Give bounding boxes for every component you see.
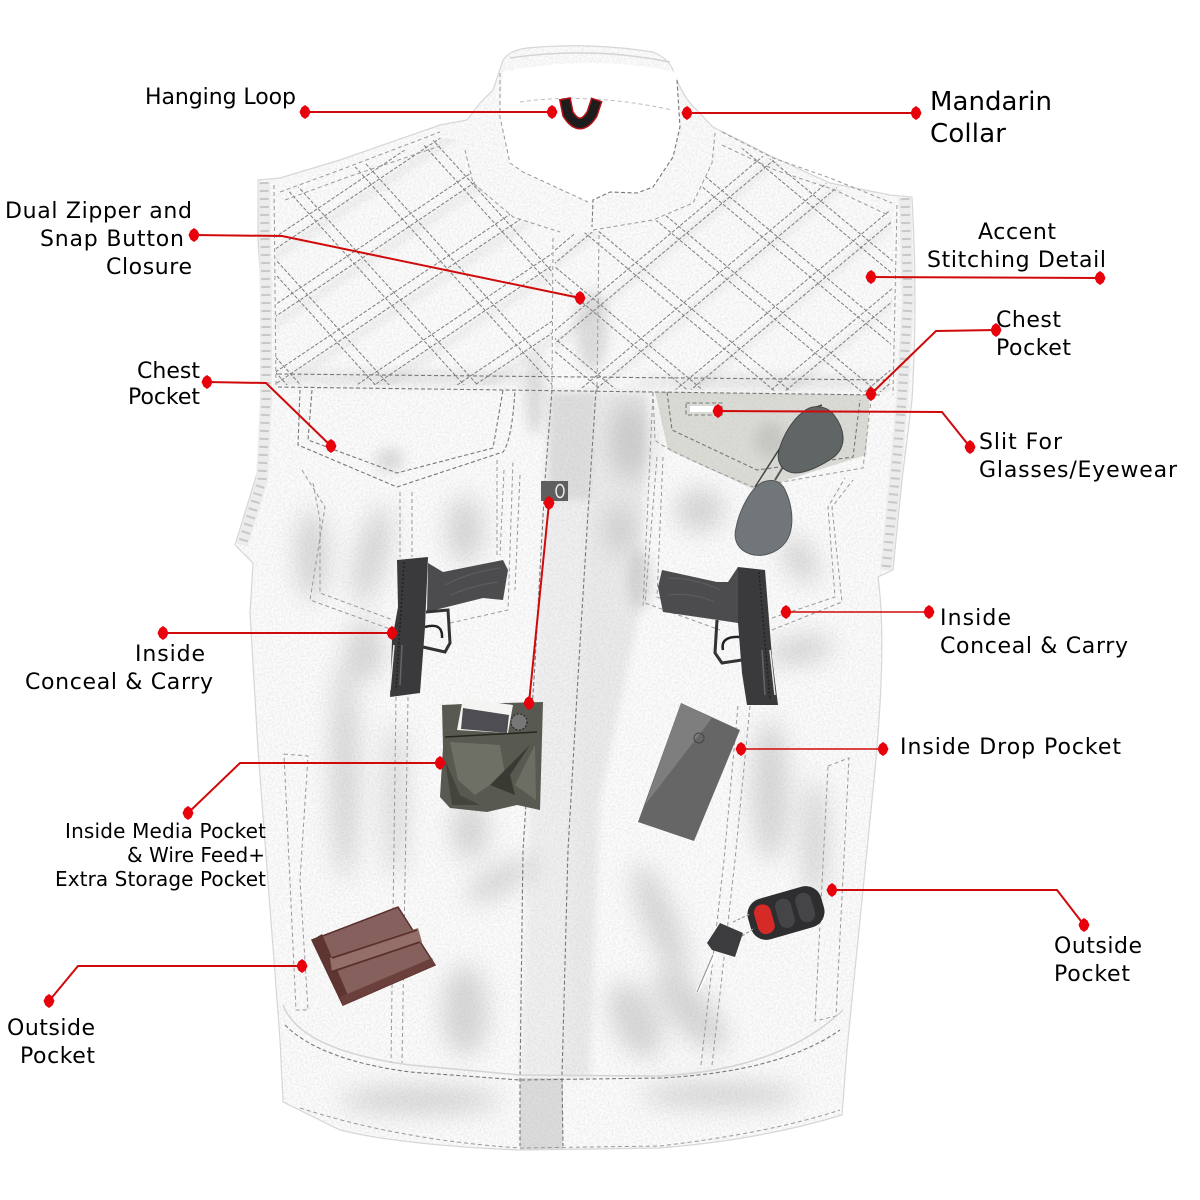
label: mandarin collar: Mandarin (930, 87, 1052, 117)
label: conceal carry left: Inside (135, 642, 205, 667)
leader: hanging loop (300, 105, 558, 119)
leader: accent stitching (866, 270, 1106, 285)
label: slit for glasses: Glasses/Eyewear (979, 458, 1178, 483)
leader: conceal carry right (780, 605, 934, 619)
collar (465, 53, 715, 232)
label: dual zipper (5, 199, 192, 280)
label: media pocket: Extra Storage Pocket (55, 867, 266, 891)
quilted diamond stitching left (276, 138, 552, 385)
quilted diamond stitching right (555, 148, 893, 392)
icon: right pistol (658, 567, 778, 705)
label: chest pocket right: Chest (996, 308, 1061, 333)
leader: chest pocket left (202, 375, 336, 453)
icon: media pouch with phone (440, 698, 543, 812)
label: conceal carry right: Conceal & Carry (940, 634, 1128, 659)
yoke shading (276, 139, 892, 392)
label: inside drop pocket: Inside Drop Pocket (900, 735, 1121, 760)
icon: left pistol (390, 557, 508, 697)
label: accent stitching: Accent (978, 220, 1056, 245)
label: dual zipper: Dual Zipper and (5, 199, 192, 224)
label: chest pocket left (128, 359, 200, 410)
label: conceal carry left (25, 642, 213, 695)
leader: dual zipper (188, 228, 586, 305)
label: media pocket: & Wire Feed+ (127, 843, 265, 867)
icon: sunglasses (735, 405, 843, 555)
leader: media pocket (182, 756, 446, 820)
label: outside pocket right: Pocket (1054, 962, 1130, 987)
icon: wallet (312, 907, 435, 1005)
label: media pocket (55, 819, 266, 891)
label: outside pocket left (7, 1016, 95, 1069)
label: mandarin collar: Collar (930, 119, 1006, 149)
leather shading (230, 40, 930, 1160)
label: conceal carry left: Conceal & Carry (25, 670, 213, 695)
label: accent stitching: Stitching Detail (927, 248, 1106, 273)
leader: drop pocket (736, 742, 888, 756)
label: outside pocket left: Outside (7, 1016, 95, 1041)
label: chest pocket left: Pocket (128, 385, 200, 410)
icon: zipper tag (541, 481, 568, 501)
vest (234, 45, 916, 1151)
icon: hanging loop (566, 104, 595, 124)
label: outside pocket right: Outside (1054, 934, 1142, 959)
label: slit for glasses: Slit For (979, 430, 1063, 455)
inner pockets and panel stitching (302, 390, 853, 1146)
hem band (283, 1005, 843, 1148)
label: hanging loop: Hanging Loop (145, 85, 296, 110)
leader: chest pocket right (866, 323, 1002, 401)
armhole braid (242, 182, 908, 570)
vest body (235, 46, 915, 1150)
side welt pockets (284, 754, 849, 1021)
leader: conceal carry left (158, 626, 398, 640)
leader: outside pocket right (826, 883, 1090, 932)
label: slit for glasses (979, 430, 1178, 483)
label: mandarin collar (930, 87, 1052, 149)
label: chest pocket right (996, 308, 1071, 361)
label: conceal carry right (940, 606, 1128, 659)
icon: smartphone (638, 703, 740, 841)
chest pocket flaps (298, 390, 872, 487)
label: dual zipper: Closure (106, 255, 192, 280)
leader: mandarin collar (682, 106, 922, 120)
label: conceal carry right: Inside (940, 606, 1011, 631)
label: outside pocket left: Pocket (20, 1044, 95, 1069)
leader: outside pocket left (44, 959, 308, 1008)
icon: car key fob (697, 882, 828, 992)
label: media pocket: Inside Media Pocket (65, 819, 266, 843)
label: dual zipper: Snap Button (40, 227, 184, 252)
yoke seams (274, 132, 897, 395)
label: accent stitching (927, 220, 1106, 273)
leader: slit for glasses (712, 404, 976, 454)
label: chest pocket right: Pocket (996, 336, 1071, 361)
label: outside pocket right (1054, 934, 1142, 987)
label: chest pocket left: Chest (137, 359, 200, 384)
leader: wire feed (524, 496, 554, 710)
